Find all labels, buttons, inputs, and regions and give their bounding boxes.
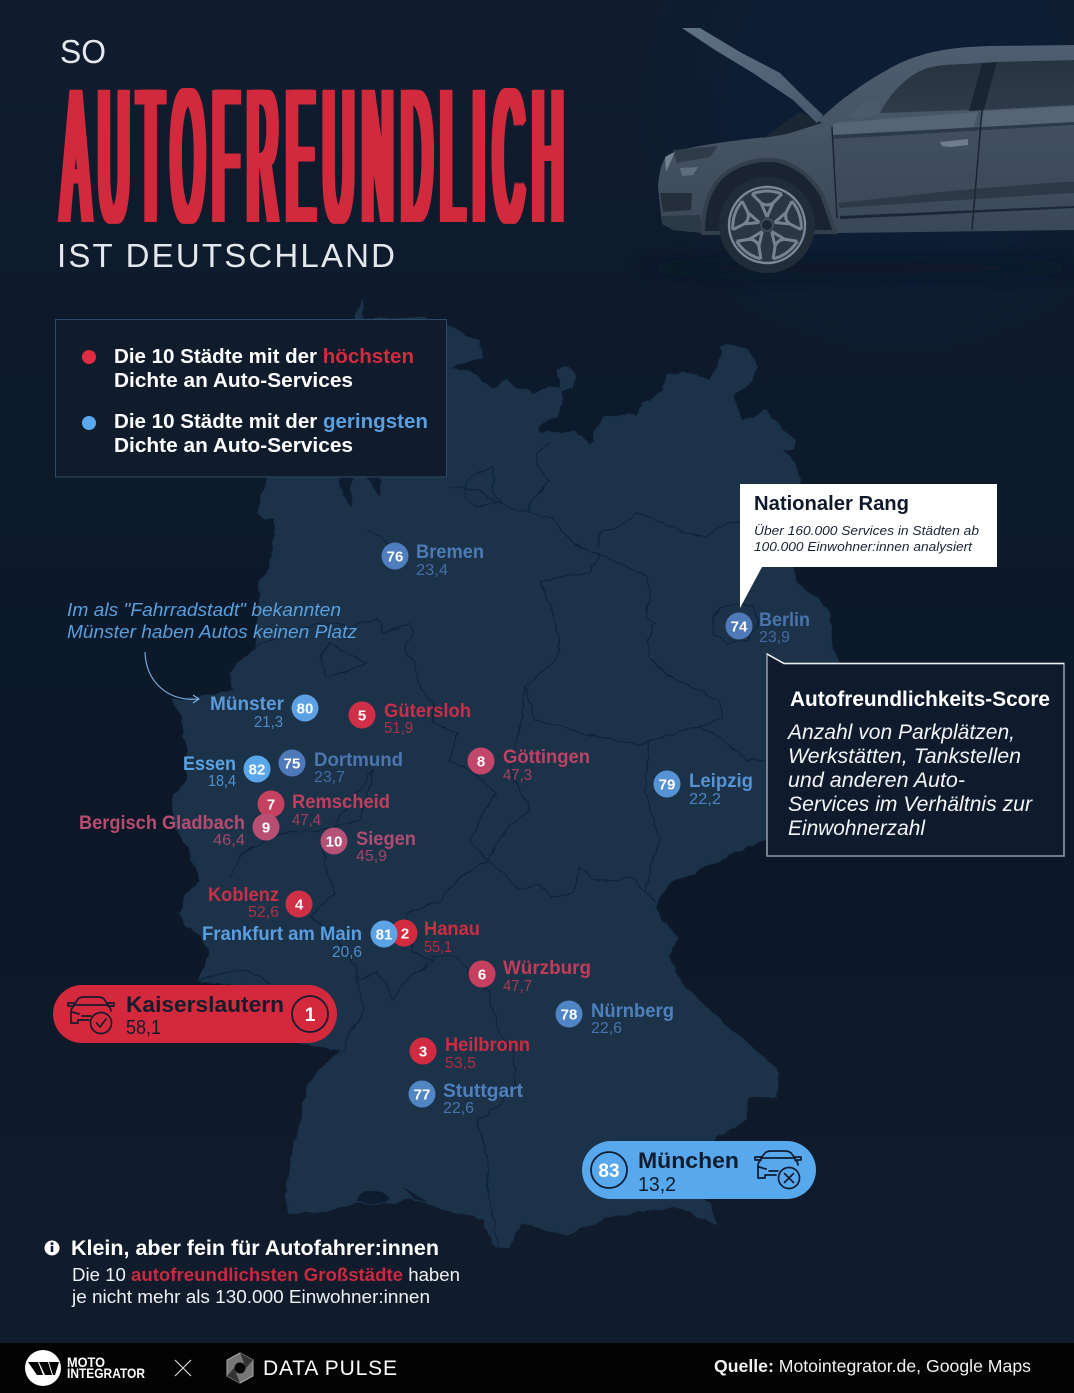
annotation: Münster: Im als "Fahrradstadt" bekannten bbox=[67, 600, 341, 620]
logo: Data Pulse bbox=[227, 1353, 397, 1383]
state borders bbox=[198, 443, 767, 1247]
callout: Autofreundlichkeits-Score: Einwohnerzahl bbox=[788, 817, 926, 840]
city: Frankfurt am Main 81: Frankfurt am Main bbox=[202, 924, 362, 945]
city: Münster 80: Münster bbox=[210, 694, 285, 715]
city: Remscheid 7 bbox=[258, 790, 390, 829]
title: AUTOFREUNDLICH: AUTOFREUNDLICH bbox=[62, 48, 572, 262]
pill: Kaiserslautern rank 1 bbox=[53, 985, 337, 1043]
city: Dortmund 75: 23,7 bbox=[314, 769, 345, 786]
city: Dortmund 75: 75 bbox=[284, 756, 300, 772]
callout: Autofreundlichkeits-Score bbox=[767, 654, 1064, 856]
city: Göttingen 8: 8 bbox=[477, 754, 485, 770]
legend dot: red bbox=[82, 350, 96, 364]
legend text: lowest density: Die 10 Städte mit der geringsten bbox=[114, 411, 428, 433]
callout: Nationaler Rang: 100.000 Einwohner:innen analysiert bbox=[754, 539, 973, 554]
panel: legend bbox=[56, 320, 446, 477]
city: Stuttgart 77: Stuttgart bbox=[443, 1081, 524, 1102]
city: Heilbronn 3: 53,5 bbox=[445, 1055, 476, 1072]
legend text: line two: Dichte an Auto-Services bbox=[114, 370, 353, 392]
city: Göttingen 8: 47,3 bbox=[503, 767, 532, 784]
arrow: annotation to Münster bbox=[145, 652, 199, 703]
city: Frankfurt am Main 81: 20,6 bbox=[332, 944, 362, 961]
callout: Nationaler Rang: Über 160.000 Services in Städten ab bbox=[754, 523, 979, 538]
city: Berlin 74: 23,9 bbox=[759, 629, 790, 646]
city: Stuttgart 77: 77 bbox=[414, 1086, 430, 1104]
city: Essen 82: 18,4 bbox=[208, 773, 236, 790]
city: Koblenz 4 bbox=[208, 885, 312, 921]
city: Nürnberg 78: Nürnberg bbox=[591, 1001, 674, 1022]
city: Göttingen 8: Göttingen bbox=[503, 747, 590, 768]
city: Remscheid 7: 47,4 bbox=[292, 812, 321, 829]
city: Leipzig 79: 79 bbox=[659, 776, 675, 794]
city: Hanau 2: 55,1 bbox=[424, 939, 452, 956]
city: Remscheid 7: Remscheid bbox=[292, 792, 390, 813]
city: Würzburg 6: 47,7 bbox=[503, 978, 532, 995]
city: Essen 82: Essen bbox=[183, 754, 236, 775]
callout: Autofreundlichkeits-Score: Services im Verhältnis zur bbox=[788, 793, 1033, 816]
city: Heilbronn 3: 3 bbox=[419, 1044, 427, 1060]
city: Bremen 76: 76 bbox=[387, 548, 403, 566]
pill: München rank 83: München bbox=[638, 1148, 739, 1173]
city: Bremen 76: Bremen bbox=[416, 542, 484, 563]
city: Bremen 76 bbox=[382, 542, 484, 579]
city: Bergisch Gladbach 9: Bergisch Gladbach bbox=[79, 813, 245, 834]
icon: car with cross bbox=[755, 1151, 801, 1188]
legend text: highest density: Die 10 Städte mit der höchsten bbox=[114, 346, 414, 368]
logo: Data Pulse: DATA PULSE bbox=[263, 1357, 397, 1380]
city: Würzburg 6: Würzburg bbox=[503, 958, 591, 979]
city: Essen 82: 82 bbox=[249, 762, 265, 778]
city: Gütersloh 5: 51,9 bbox=[384, 720, 413, 737]
pill: München rank 83: 13,2 bbox=[638, 1174, 676, 1196]
city: Berlin 74: 74 bbox=[731, 618, 748, 636]
city: Dortmund 75 bbox=[278, 750, 403, 786]
annotation: Münster bbox=[67, 600, 357, 642]
city: Heilbronn 3 bbox=[410, 1035, 530, 1072]
city: Münster 80: 80 bbox=[297, 700, 313, 718]
city: Siegen 10: 45,9 bbox=[356, 848, 387, 865]
callout: Nationaler Rang bbox=[740, 484, 997, 608]
icon: collaboration cross bbox=[175, 1360, 191, 1376]
city: Leipzig 79: Leipzig bbox=[689, 771, 753, 792]
city: Siegen 10: 10 bbox=[326, 834, 342, 850]
logo: Moto Integrator: INTEGRATOR bbox=[67, 1365, 145, 1381]
callout: Autofreundlichkeits-Score: Anzahl von Parkplätzen, bbox=[786, 721, 1015, 744]
map: Germany with state borders bbox=[172, 300, 842, 1248]
map landmass bbox=[172, 300, 842, 1248]
callout: Autofreundlichkeits-Score: Werkstätten, Tankstellen bbox=[788, 745, 1021, 768]
city: Göttingen 8 bbox=[468, 747, 590, 784]
city: Bergisch Gladbach 9: 46,4 bbox=[213, 832, 245, 849]
city: Koblenz 4: 52,6 bbox=[248, 904, 279, 921]
city: Hanau 2: 2 bbox=[401, 926, 409, 942]
city: Dortmund 75: Dortmund bbox=[314, 750, 403, 771]
city: Gütersloh 5: Gütersloh bbox=[384, 701, 471, 722]
city: Koblenz 4: Koblenz bbox=[208, 885, 279, 906]
city: Siegen 10 bbox=[320, 828, 416, 865]
annotation: Münster: Münster haben Autos keinen Platz bbox=[67, 622, 357, 642]
heading: SO: SO bbox=[60, 33, 106, 70]
heading: IST DEUTSCHLAND: IST DEUTSCHLAND bbox=[57, 237, 395, 274]
car photo with open hood bbox=[640, 28, 1074, 275]
pill: Kaiserslautern rank 1: 1 bbox=[305, 1005, 316, 1026]
city: Hanau 2: Hanau bbox=[424, 919, 480, 940]
city: Frankfurt am Main 81: 81 bbox=[376, 926, 392, 944]
city: Heilbronn 3: Heilbronn bbox=[445, 1035, 530, 1056]
city: Hanau 2 bbox=[390, 919, 480, 956]
city: Gütersloh 5 bbox=[348, 701, 471, 737]
city: Münster 80: 21,3 bbox=[254, 714, 283, 731]
city: Nürnberg 78 bbox=[556, 1000, 674, 1037]
callout: Nationaler Rang: Nationaler Rang bbox=[754, 493, 909, 515]
city: Leipzig 79: 22,2 bbox=[689, 791, 721, 808]
note: small cities: Klein, aber fein für Autofahrer:innen bbox=[71, 1237, 439, 1260]
source: Quelle: Motointegrator.de, Google Maps bbox=[714, 1356, 1031, 1376]
logo: Moto Integrator bbox=[25, 1350, 145, 1386]
city: Münster 80 bbox=[210, 694, 318, 731]
city: Nürnberg 78: 22,6 bbox=[591, 1020, 622, 1037]
note: small cities: je nicht mehr als 130.000 Einwohner:innen bbox=[71, 1287, 430, 1307]
city: Nürnberg 78: 78 bbox=[561, 1006, 577, 1024]
city: Essen 82 bbox=[183, 754, 270, 790]
icon: car with check bbox=[68, 997, 114, 1034]
footer bar bbox=[0, 1343, 1074, 1393]
pill: Kaiserslautern rank 1: Kaiserslautern bbox=[126, 992, 284, 1017]
city: Würzburg 6: 6 bbox=[478, 966, 486, 984]
callout: Autofreundlichkeits-Score: und anderen Auto- bbox=[788, 769, 965, 792]
Jade bight and Weser estuary bbox=[339, 477, 381, 507]
city: Gütersloh 5: 5 bbox=[358, 708, 366, 724]
Lake Constance bbox=[356, 1187, 428, 1204]
note: small cities bbox=[44, 1237, 460, 1307]
city: Remscheid 7: 7 bbox=[267, 796, 275, 814]
city: Stuttgart 77: 22,6 bbox=[443, 1100, 474, 1117]
city: Bergisch Gladbach 9: 9 bbox=[262, 820, 270, 836]
city: Berlin 74 bbox=[726, 610, 810, 646]
pill: München rank 83 bbox=[582, 1141, 816, 1199]
city: Stuttgart 77 bbox=[408, 1080, 524, 1117]
city: Bergisch Gladbach 9 bbox=[79, 813, 280, 849]
city: Würzburg 6 bbox=[468, 958, 591, 995]
logo: Moto Integrator: MOTO bbox=[67, 1354, 105, 1370]
callout: Autofreundlichkeits-Score: Autofreundlichkeits-Score bbox=[790, 688, 1050, 711]
city: Berlin 74: Berlin bbox=[759, 610, 810, 631]
pill: München rank 83: 83 bbox=[598, 1161, 620, 1182]
note: small cities: Die 10 autofreundlichsten Großstädte haben bbox=[72, 1265, 460, 1285]
Fehmarn island bbox=[556, 366, 576, 391]
legend dot: blue bbox=[82, 416, 96, 430]
city: Leipzig 79 bbox=[654, 770, 753, 808]
city: Frankfurt am Main 81 bbox=[202, 920, 398, 961]
legend text: line four: Dichte an Auto-Services bbox=[114, 435, 353, 457]
city: Bremen 76: 23,4 bbox=[416, 562, 448, 579]
pill: Kaiserslautern rank 1: 58,1 bbox=[126, 1017, 161, 1039]
icon: info bbox=[44, 1240, 60, 1256]
city: Siegen 10: Siegen bbox=[356, 829, 416, 850]
city: Koblenz 4: 4 bbox=[295, 896, 304, 914]
